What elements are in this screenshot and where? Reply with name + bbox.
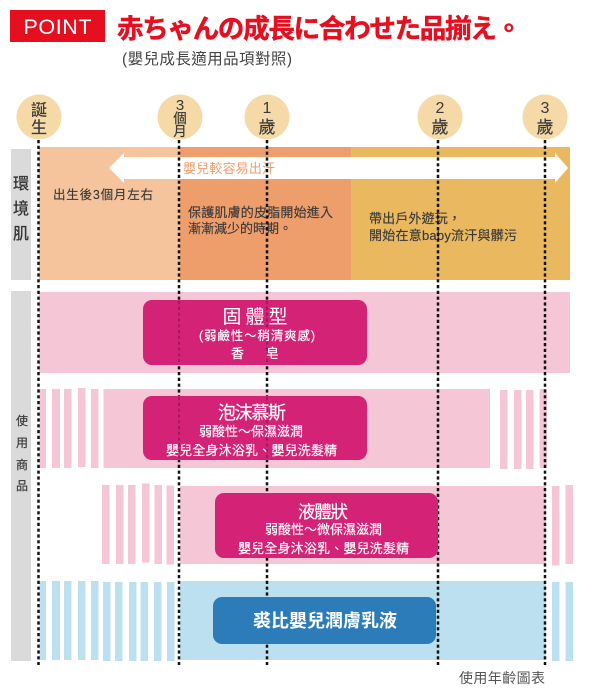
age marker: 2 years: 歲 <box>432 118 448 137</box>
row label: products used: 使 <box>16 413 28 428</box>
product box: liquid: 嬰兒全身沐浴乳、嬰兒洗髮精 <box>238 541 409 556</box>
product box: foam: 弱酸性～保濕滋潤 <box>199 424 303 439</box>
footer caption: 使用年齡圖表 <box>459 670 545 686</box>
age marker: 2 years <box>418 94 462 140</box>
age marker: 3 years: 3 <box>541 100 550 117</box>
timeline dotted lines <box>38 140 545 665</box>
product box: foam: 嬰兒全身沐浴乳、嬰兒洗髮精 <box>166 443 337 458</box>
bar: lotion usage <box>40 581 573 661</box>
panel: skin environment band <box>39 147 570 280</box>
age marker: 1 year: 歲 <box>258 118 276 137</box>
age marker: 3 months: 3 <box>176 97 184 114</box>
row label: products used: 商 <box>16 457 28 472</box>
age marker: 3 years: 歲 <box>536 118 554 137</box>
product box: foam: 泡沫慕斯 <box>218 403 286 423</box>
title: 赤ちゃんの成長に合わせた品揃え。 <box>117 14 522 44</box>
sweating label: 嬰兒較容易出汗 <box>183 161 275 176</box>
age marker: 1 year <box>244 94 290 140</box>
product box: liquid <box>215 493 438 558</box>
text: toddler stage: 開始在意baby流汗與髒污 <box>369 228 517 243</box>
text: toddler stage: 帶出戶外遊玩， <box>369 211 461 226</box>
product box: liquid: 液體狀 <box>298 502 348 522</box>
bar: foam usage <box>40 388 547 469</box>
product box: solid soap <box>143 300 367 365</box>
stage: after 1 year <box>351 147 570 280</box>
age marker: birth: 誕 <box>31 102 47 120</box>
age marker: 2 years: 2 <box>436 100 445 117</box>
POINT badge <box>10 10 105 42</box>
POINT badge: POINT <box>24 15 92 39</box>
text: birth stage: 出生後3個月左右 <box>53 187 153 202</box>
row label: skin environment: 肌 <box>13 225 29 243</box>
age marker: 3 months <box>158 94 202 140</box>
product box: solid soap: 香 皂 <box>231 346 279 361</box>
bar: liquid usage <box>102 484 573 566</box>
product box: foam <box>143 396 367 460</box>
text: toddler stage <box>369 211 517 243</box>
age marker: 1 year: 1 <box>263 100 272 117</box>
product box: liquid: 弱酸性～微保濕滋潤 <box>265 522 382 537</box>
row label: products used: 用 <box>16 436 28 450</box>
row label: products used: 品 <box>16 479 28 493</box>
bar: solid soap usage <box>39 292 570 373</box>
product box: lotion <box>213 597 436 644</box>
subtitle: (嬰兒成長適用品項對照) <box>122 50 292 68</box>
text: infant stage <box>188 205 333 236</box>
age marker: birth <box>16 94 62 140</box>
arrow: sweating period <box>109 153 568 183</box>
age marker: birth: 生 <box>31 119 47 137</box>
text: infant stage: 漸漸減少的時期。 <box>188 221 292 236</box>
row label: products used <box>11 291 31 661</box>
row label: skin environment: 環 <box>13 176 29 193</box>
age marker: 3 months: 月 <box>173 124 187 139</box>
product box: lotion: 裘比嬰兒潤膚乳液 <box>253 611 397 631</box>
row label: skin environment <box>11 149 31 280</box>
product box: solid soap: (弱鹼性～稍清爽感) <box>199 328 315 343</box>
row label: skin environment: 境 <box>13 199 29 218</box>
age marker: 3 months: 個 <box>173 111 187 126</box>
stage: birth to 3 months <box>39 147 180 280</box>
text: infant stage: 保護肌膚的皮脂開始進入 <box>188 205 333 220</box>
product box: solid soap: 固 體 型 <box>222 306 288 328</box>
stage: 3 months to 1 year <box>180 147 351 280</box>
age marker: 3 years <box>522 94 568 140</box>
